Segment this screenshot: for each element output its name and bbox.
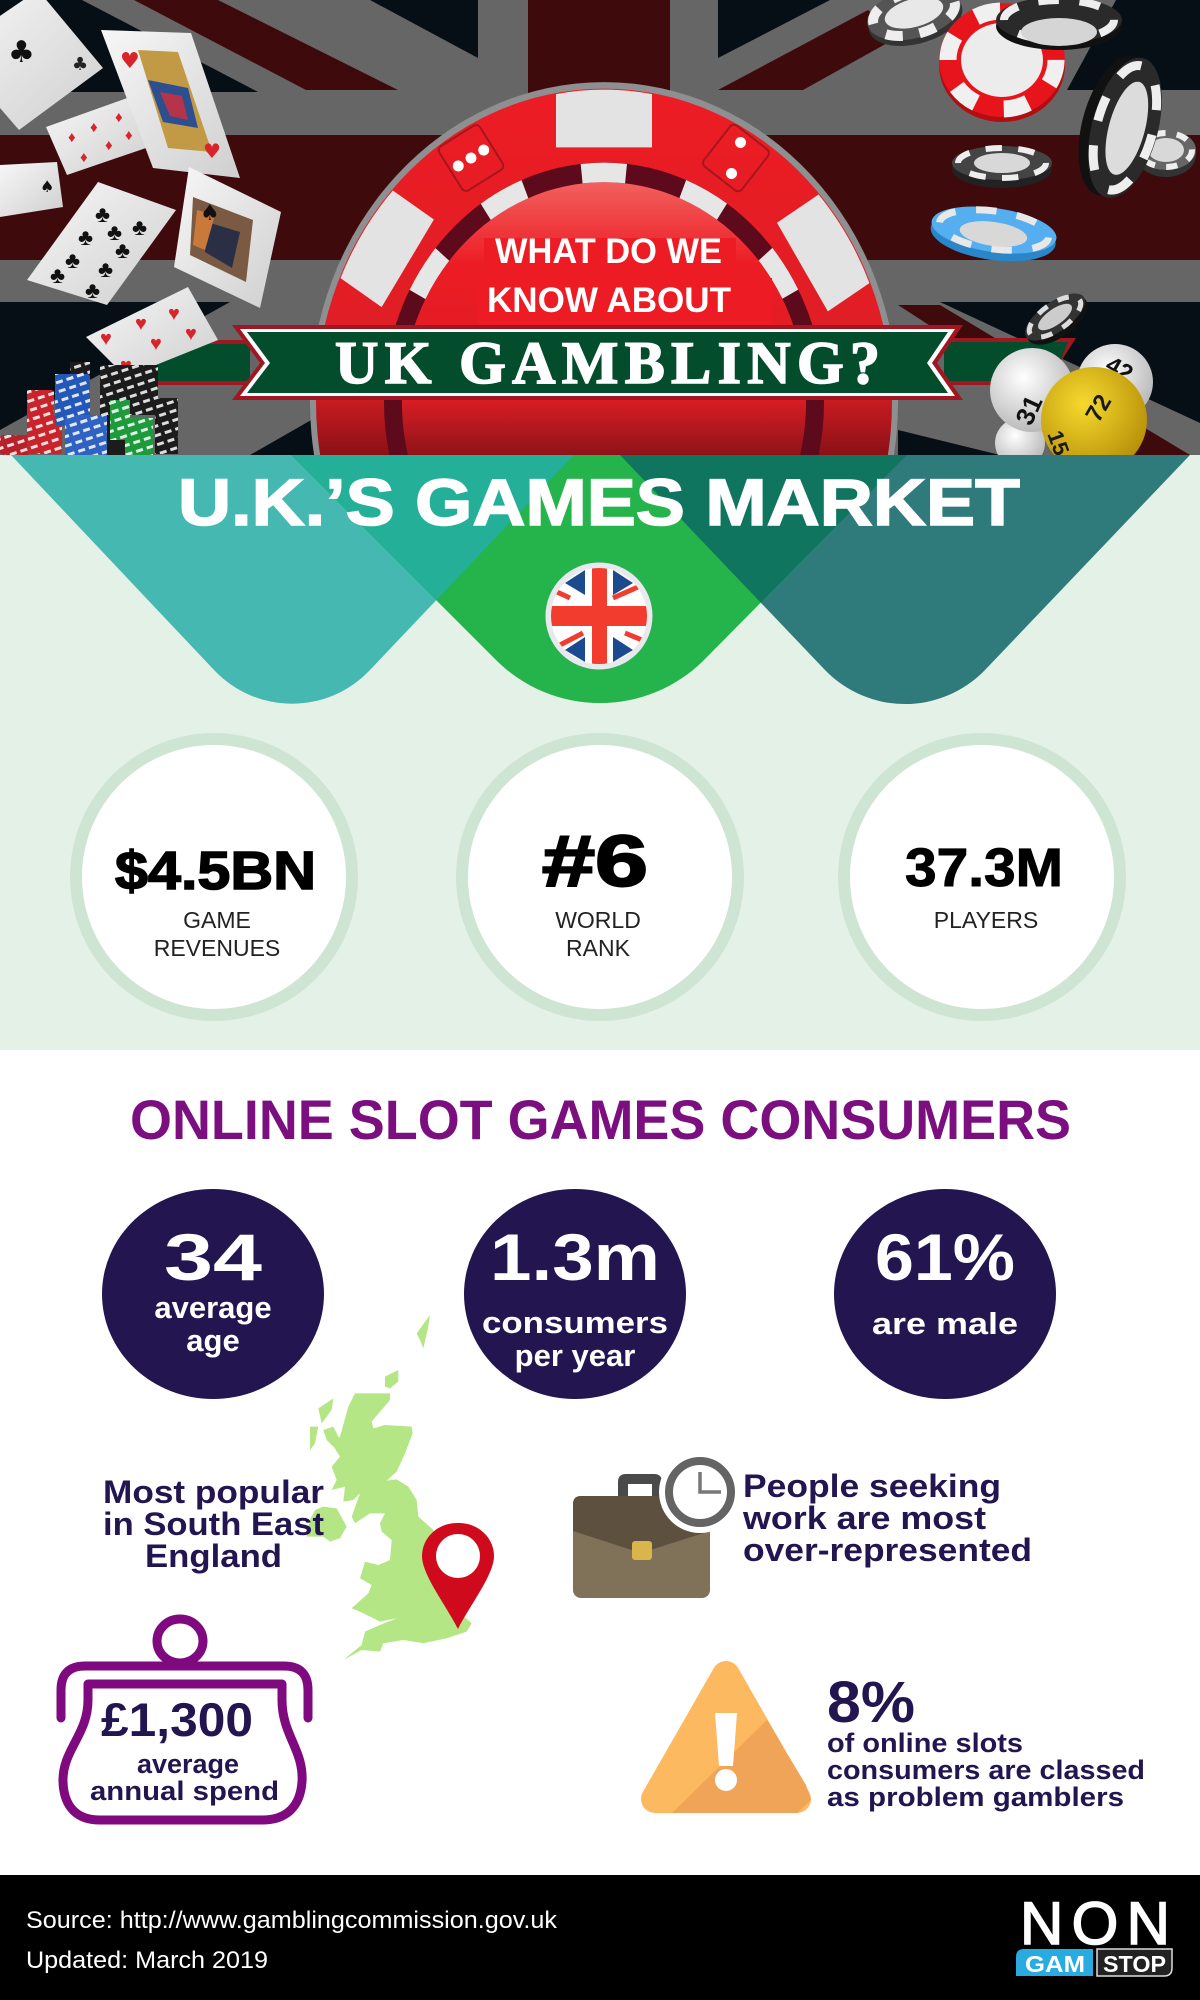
chip stacks xyxy=(0,362,178,455)
stat: average age xyxy=(102,1189,324,1399)
logo: Non Gam Stop: GAM xyxy=(1025,1951,1085,1977)
playing cards: ♥ xyxy=(135,313,147,335)
text: problem gamblers: as problem gamblers xyxy=(827,1782,1124,1812)
bingo balls: 42 xyxy=(1101,351,1137,388)
playing cards: ♦ xyxy=(125,127,133,144)
logo: Non Gam Stop: STOP xyxy=(1103,1951,1166,1977)
playing cards: ♦ xyxy=(90,119,98,136)
stat: world rank: WORLD xyxy=(555,907,641,933)
logo: Non Gam Stop: NON xyxy=(1020,1890,1170,1957)
playing cards: ♣ xyxy=(132,214,147,240)
stat: are male: 61% xyxy=(875,1220,1015,1294)
icon: purse with annual spend: average xyxy=(137,1749,239,1779)
playing cards: ♥ xyxy=(203,139,221,163)
map: United Kingdom with pin xyxy=(307,1315,494,1660)
playing cards: ♥ xyxy=(168,303,180,325)
updated text: Updated: March 2019 xyxy=(26,1947,268,1974)
playing cards: ♣ xyxy=(107,219,122,245)
text: people seeking work: People seeking xyxy=(743,1468,1001,1504)
playing cards: ♦ xyxy=(105,137,113,154)
stat: world rank: #6 xyxy=(542,822,648,902)
icon: left die xyxy=(437,123,505,193)
text: problem gamblers: 8% xyxy=(827,1670,915,1735)
flying chips xyxy=(861,0,1196,354)
bingo balls: 31 xyxy=(1009,391,1049,430)
stat: game revenues: REVENUES xyxy=(154,935,280,961)
stat: consumers per year xyxy=(464,1189,686,1399)
heading: online slot games consumers: ONLINE SLOT GAMES CONSUMERS xyxy=(130,1088,1071,1151)
playing cards: ♣ xyxy=(50,262,65,288)
stat: game revenues: GAME xyxy=(183,907,251,933)
text: most popular in South East England: in South East xyxy=(103,1506,324,1542)
stat: consumers per year: per year xyxy=(515,1338,635,1373)
stat: game revenues: $4.5BN xyxy=(115,841,316,901)
icon: purse with annual spend: annual spend xyxy=(90,1776,279,1806)
panel: online slot games consumers xyxy=(0,1050,1200,1875)
stat: average age: average xyxy=(154,1290,272,1325)
heading: UK games market: U.K.’S GAMES MARKET xyxy=(178,465,1020,539)
text: people seeking work: over-represented xyxy=(743,1532,1032,1568)
stat: are male xyxy=(834,1189,1056,1399)
text: problem gamblers: consumers are classed xyxy=(827,1755,1145,1785)
playing cards: ♣ xyxy=(98,256,113,282)
stat: world rank xyxy=(462,739,738,1015)
heading: what do we know about xyxy=(478,232,772,325)
playing cards: ♦ xyxy=(68,129,76,146)
playing cards: ♣ xyxy=(72,54,88,75)
playing cards: ♦ xyxy=(115,109,123,126)
ribbon tails xyxy=(130,338,1076,385)
icon: briefcase with clock xyxy=(573,1451,741,1598)
bingo balls: 15 xyxy=(1042,427,1074,459)
bingo balls: 72 xyxy=(1080,390,1117,427)
icon: purse with annual spend xyxy=(61,1619,308,1820)
heading: what do we know about: WHAT DO WE xyxy=(495,232,722,271)
icon: union flag xyxy=(545,562,655,672)
playing cards: ♣ xyxy=(115,237,130,263)
heading: what do we know about: KNOW ABOUT xyxy=(487,281,731,320)
stat: game revenues xyxy=(76,739,352,1015)
overlapping pennant shapes xyxy=(11,455,1190,704)
stat: consumers per year: consumers xyxy=(482,1305,668,1340)
source text: Source: http://www.gamblingcommission.gov.uk xyxy=(26,1907,558,1934)
stat: players xyxy=(844,739,1120,1015)
playing cards: ♥ xyxy=(100,328,112,350)
text: problem gamblers: of online slots xyxy=(827,1728,1023,1758)
playing cards: ♣ xyxy=(95,201,110,227)
playing cards: ♣ xyxy=(65,247,80,273)
playing cards: ♣ xyxy=(85,277,100,303)
stat: average age: age xyxy=(186,1323,240,1358)
text: people seeking work: work are most xyxy=(742,1500,986,1536)
stat: world rank: RANK xyxy=(566,935,631,961)
stat: consumers per year: 1.3m xyxy=(490,1220,660,1294)
text: most popular in South East England: England xyxy=(145,1538,282,1574)
text: people seeking work xyxy=(742,1468,1032,1568)
stat: players: PLAYERS xyxy=(934,907,1038,933)
playing cards: ♥ xyxy=(150,333,162,355)
text: problem gamblers xyxy=(827,1670,1145,1812)
footer xyxy=(0,1875,1200,2000)
text: most popular in South East England xyxy=(103,1474,324,1574)
playing cards: ♣ xyxy=(78,224,93,250)
stat: players: 37.3M xyxy=(905,838,1063,898)
header: casino banner xyxy=(0,0,1200,455)
playing cards: ♠ xyxy=(200,201,220,226)
giant poker chip xyxy=(310,82,898,455)
bingo balls xyxy=(990,344,1153,455)
title ribbon: UK gambling xyxy=(232,325,963,400)
flag background xyxy=(0,0,1200,455)
icon: purse with annual spend: £1,300 xyxy=(101,1693,253,1746)
text: most popular in South East England: Most popular xyxy=(103,1474,324,1510)
icon: warning triangle xyxy=(655,1675,811,1813)
playing cards: ♣ xyxy=(8,35,35,70)
title ribbon: UK gambling: UK GAMBLING? xyxy=(335,330,880,396)
playing cards: ♥ xyxy=(120,49,140,74)
stat: average age: 34 xyxy=(164,1220,262,1294)
playing cards xyxy=(0,0,281,377)
stat: are male: are male xyxy=(872,1306,1018,1341)
icon: right die xyxy=(701,123,771,193)
playing cards: ♥ xyxy=(185,323,197,345)
playing cards: ♠ xyxy=(40,177,54,196)
playing cards: ♦ xyxy=(80,149,88,166)
panel: games market xyxy=(0,455,1200,1050)
playing cards: ♥ xyxy=(120,355,132,377)
